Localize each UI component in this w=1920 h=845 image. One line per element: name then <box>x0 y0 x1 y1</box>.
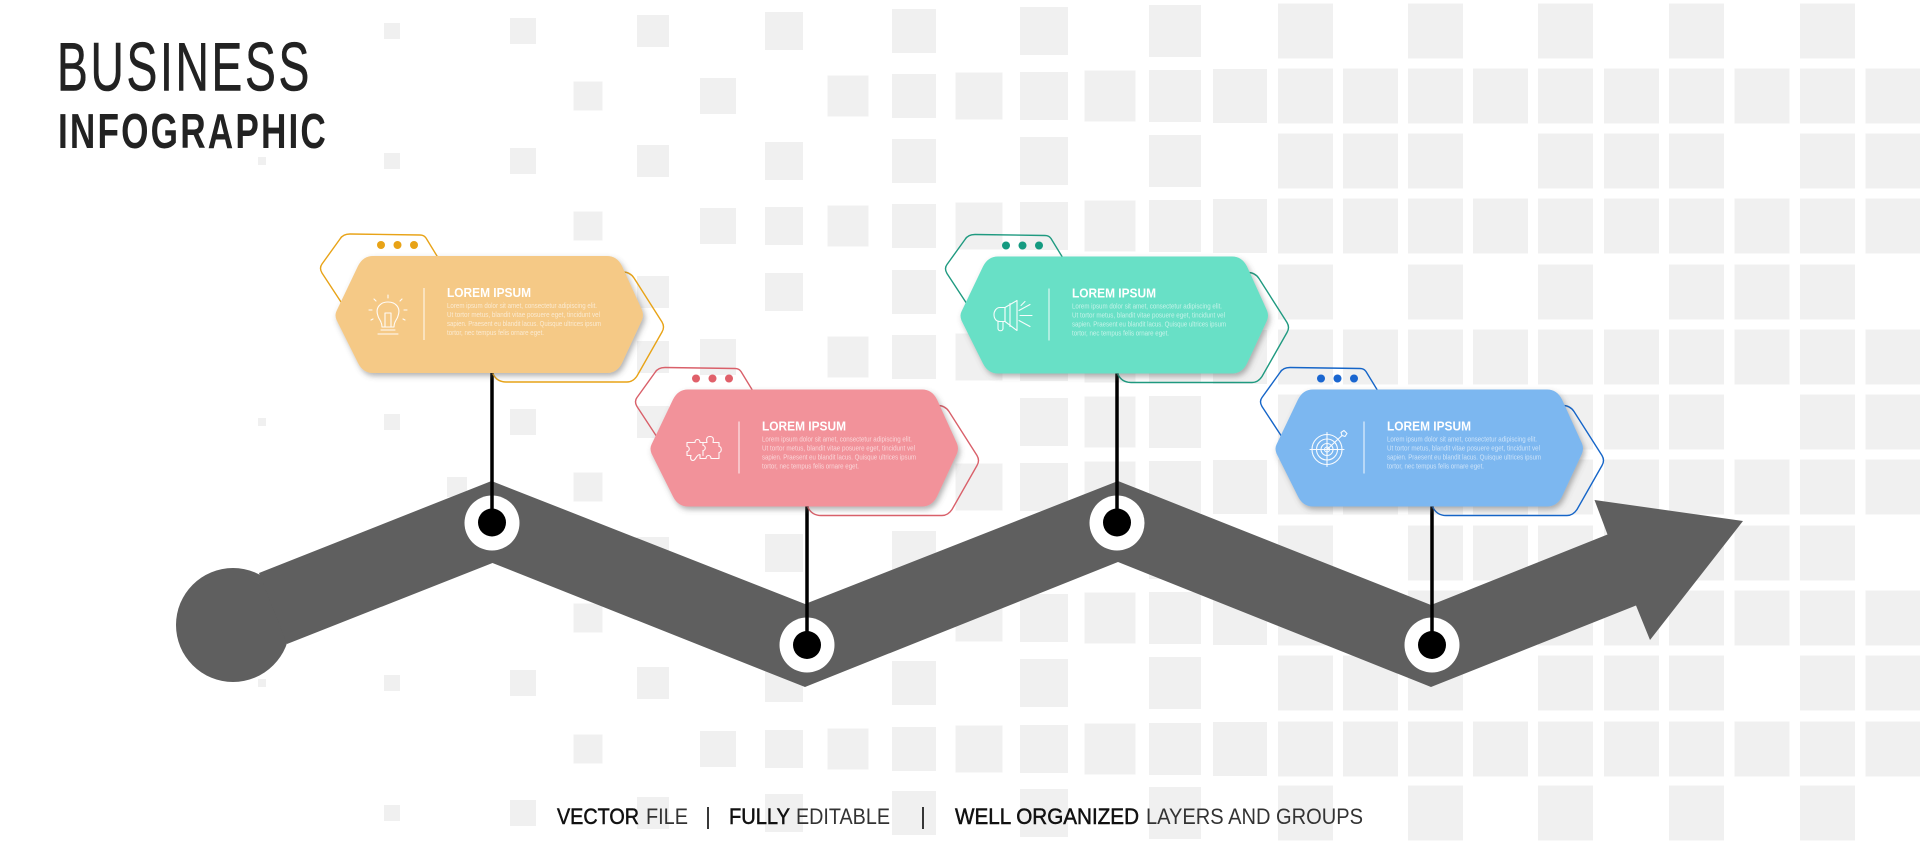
footer tagline: EDITABLE <box>796 804 890 829</box>
milestone node 1 <box>464 373 520 550</box>
card body <box>650 390 958 506</box>
heading: LOREM IPSUM <box>762 420 846 434</box>
body text <box>1387 434 1541 470</box>
card body <box>960 256 1268 374</box>
footer tagline: LAYERS AND GROUPS <box>1146 804 1363 829</box>
milestone node 3 <box>1090 373 1144 550</box>
heading: LOREM IPSUM <box>1387 420 1471 434</box>
title: BUSINESS <box>57 28 312 106</box>
body text: Lorem ipsum dolor sit amet, consectetur adipiscing elit. <box>447 301 597 310</box>
body text: Ut tortor metus, blandit vitae posuere eget, tincidunt vel <box>447 310 600 319</box>
body text: Lorem ipsum dolor sit amet, consectetur adipiscing elit. <box>1072 302 1222 310</box>
card dots <box>1002 242 1043 250</box>
footer tagline: FULLY <box>729 804 790 829</box>
divider <box>1048 288 1050 340</box>
icon: light bulb <box>369 295 407 334</box>
footer tagline: FILE <box>646 804 688 829</box>
background tile grid <box>262 31 1893 813</box>
milestone node 4 <box>1404 506 1460 672</box>
card outline <box>946 234 1288 382</box>
body text <box>447 301 601 337</box>
body text: Ut tortor metus, blandit vitae posuere eget, tincidunt vel <box>762 444 915 452</box>
zigzag arrow <box>176 481 1743 687</box>
body text: tortor, nec tempus felis ornare eget. <box>447 328 544 337</box>
body text: tortor, nec tempus felis ornare eget. <box>1387 462 1484 470</box>
card outline <box>636 368 978 516</box>
body text: sapien. Praesent eu blandit lacus. Quisque ultrices ipsum <box>447 319 601 328</box>
footer tagline <box>557 804 1363 829</box>
icon: megaphone <box>994 300 1032 331</box>
body text: Lorem ipsum dolor sit amet, consectetur adipiscing elit. <box>762 434 912 444</box>
card dots <box>692 374 733 382</box>
heading: LOREM IPSUM <box>1072 286 1156 300</box>
body text: sapien. Praesent eu blandit lacus. Quisque ultrices ipsum <box>1072 320 1226 328</box>
footer tagline: WELL ORGANIZED <box>955 804 1139 829</box>
body text <box>1072 302 1226 338</box>
panel: orange card <box>320 234 664 382</box>
icon: target <box>1310 430 1347 466</box>
card body <box>336 256 643 373</box>
body text: Ut tortor metus, blandit vitae posuere eget, tincidunt vel <box>1387 444 1540 452</box>
card outline <box>320 234 664 382</box>
card body <box>1276 390 1583 506</box>
panel: teal card <box>946 234 1288 382</box>
card dots <box>1317 374 1358 382</box>
body text: Ut tortor metus, blandit vitae posuere eget, tincidunt vel <box>1072 310 1225 320</box>
footer tagline: VECTOR <box>557 804 639 829</box>
body text: sapien. Praesent eu blandit lacus. Quisque ultrices ipsum <box>762 452 916 462</box>
icon: puzzle <box>687 436 721 460</box>
divider <box>423 288 425 340</box>
title: INFOGRAPHIC <box>58 105 328 159</box>
card outline <box>1260 368 1604 516</box>
divider <box>738 422 740 474</box>
body text: Lorem ipsum dolor sit amet, consectetur adipiscing elit. <box>1387 434 1537 444</box>
title <box>57 28 328 159</box>
card dots <box>377 241 418 249</box>
heading: LOREM IPSUM <box>447 286 531 300</box>
body text: tortor, nec tempus felis ornare eget. <box>762 462 859 470</box>
body text: tortor, nec tempus felis ornare eget. <box>1072 328 1169 338</box>
panel: blue card <box>1260 368 1604 516</box>
milestone node 2 <box>780 506 834 672</box>
divider <box>1363 422 1365 474</box>
body text <box>762 434 916 470</box>
panel: pink card <box>636 368 978 516</box>
body text: sapien. Praesent eu blandit lacus. Quisque ultrices ipsum <box>1387 452 1541 462</box>
